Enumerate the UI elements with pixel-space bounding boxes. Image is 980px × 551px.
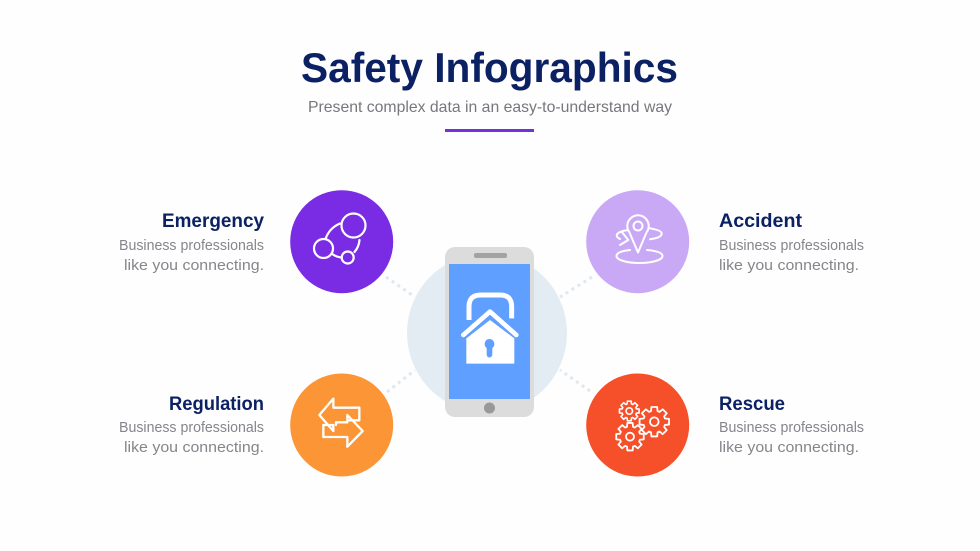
- text block: accident: [719, 237, 864, 274]
- title underline: [445, 129, 534, 132]
- text block: rescue: Business professionals: [719, 419, 864, 436]
- heading: regulation: Regulation: [169, 394, 264, 415]
- panel: accident: [586, 190, 864, 293]
- icon: house with padlock: [463, 295, 516, 364]
- text block: accident: Business professionals: [719, 237, 864, 254]
- title: Safety Infographics: [301, 44, 678, 91]
- text block: emergency: like you connecting.: [124, 257, 264, 274]
- backdrop circle: [407, 253, 567, 413]
- text block: rescue: like you connecting.: [719, 439, 859, 456]
- text block: regulation: [119, 419, 264, 456]
- heading: emergency: Emergency: [162, 211, 264, 232]
- text block: rescue: [719, 419, 864, 456]
- subtitle: Present complex data in an easy-to-understand way: [308, 99, 672, 116]
- heading: rescue: Rescue: [719, 394, 785, 415]
- text block: emergency: [119, 237, 264, 274]
- text block: regulation: like you connecting.: [124, 439, 264, 456]
- icon: gears: [586, 374, 689, 476]
- panel: rescue: [586, 374, 864, 476]
- speaker: [474, 253, 507, 258]
- text block: accident: like you connecting.: [719, 257, 859, 274]
- panel: emergency: [119, 190, 393, 293]
- central phone illustration: [407, 247, 567, 417]
- icon: exchange arrows: [290, 374, 393, 476]
- text block: emergency: Business professionals: [119, 237, 264, 254]
- icon: linked circles: [290, 190, 393, 293]
- heading: accident: Accident: [719, 211, 803, 232]
- phone body: [445, 247, 534, 417]
- phone screen: [449, 264, 530, 399]
- icon: location pin: [586, 190, 689, 293]
- text block: regulation: Business professionals: [119, 419, 264, 436]
- home button: [484, 402, 495, 414]
- panel: regulation: [119, 374, 393, 476]
